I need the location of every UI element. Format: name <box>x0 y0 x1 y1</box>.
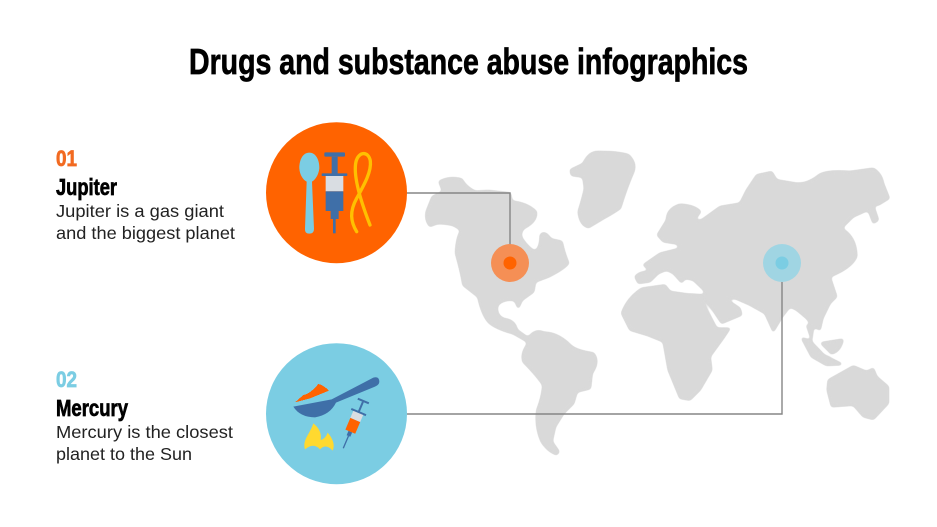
marker: North America <box>491 244 529 282</box>
description Jupiter: Jupiter is a gas giant <box>56 201 224 221</box>
icon: ribbon <box>352 154 370 232</box>
description Mercury: planet to the Sun <box>56 444 192 464</box>
panel: 02 Mercury text <box>56 367 233 464</box>
world map <box>426 152 889 454</box>
map: Americas and Greenland <box>426 152 634 454</box>
description Mercury: Mercury is the closest <box>56 422 233 442</box>
icon circle: spoon, flame and syringe <box>266 343 407 484</box>
icon: syringe <box>336 397 371 451</box>
description Jupiter <box>56 201 235 243</box>
panel: 01 Jupiter text <box>56 146 235 243</box>
description Mercury <box>56 422 233 464</box>
icon: spoon <box>293 377 379 417</box>
heading Mercury: Mercury <box>56 395 128 421</box>
icon: spoon <box>299 153 319 234</box>
icon: powder <box>295 384 329 402</box>
number 01: 01 <box>56 146 77 171</box>
icon circle: spoon, syringe and ribbon <box>266 122 407 263</box>
marker: Asia <box>763 244 801 282</box>
icon: syringe <box>322 152 347 233</box>
title: Drugs and substance abuse infographics <box>189 41 748 82</box>
map: Eurasia, Africa, Australia <box>622 168 889 419</box>
number 02: 02 <box>56 367 77 392</box>
heading Jupiter: Jupiter <box>56 174 117 200</box>
icon: flame <box>304 423 334 451</box>
description Jupiter: and the biggest planet <box>56 223 235 243</box>
connector: Mercury to Asia <box>407 282 782 414</box>
connector: Jupiter to North America <box>407 193 510 245</box>
